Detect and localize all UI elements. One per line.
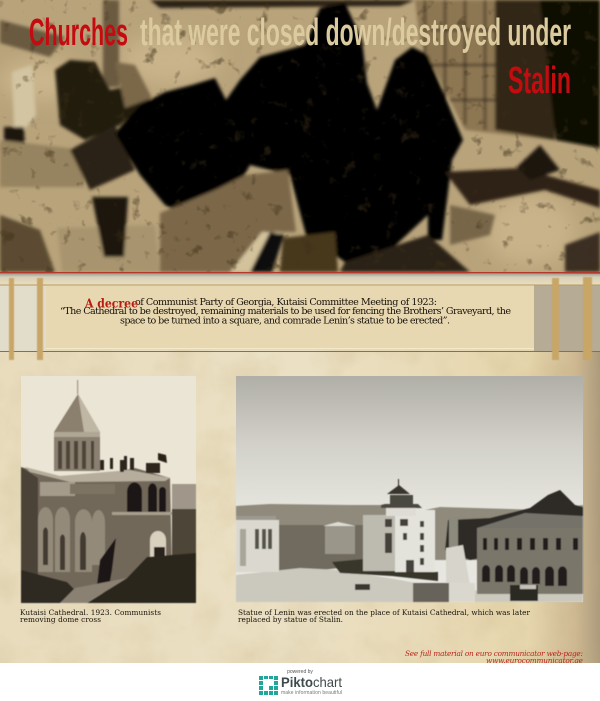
stones and rubble — [160, 170, 296, 272]
decree text: of Communist Party of Georgia, Kutaisi Committee Meeting of 1923: — [135, 297, 437, 308]
scroll rods — [9, 277, 592, 360]
footer: Piktochart logo — [259, 669, 342, 696]
figures on the roof — [100, 456, 160, 473]
decree text: “The Cathedral to be destroyed, remaining materials to be used for fencing the Brothers’ Graveyard, the — [60, 306, 511, 317]
small building — [325, 526, 355, 554]
left pavilion — [236, 520, 279, 572]
red divider under the header — [0, 272, 600, 274]
crowd — [87, 553, 196, 603]
page background: aged paper — [0, 272, 600, 663]
building background — [150, 0, 415, 8]
decree text: space to be turned into a square, and comrade Lenin’s statue to be erected”. — [120, 316, 450, 326]
wordmark: Piktochart — [281, 674, 342, 690]
right background building — [172, 484, 196, 509]
portal — [150, 531, 166, 560]
caption: Kutaisi Cathedral: removing dome cross — [20, 615, 101, 624]
decree text — [60, 297, 511, 326]
caption: Kutaisi Cathedral: Kutaisi Cathedral. 1923. Communists — [20, 608, 161, 617]
icon: logo squares — [259, 676, 278, 695]
photo: Kutaisi Cathedral — [21, 376, 196, 603]
central tower building — [363, 515, 396, 571]
photo grain — [0, 0, 600, 272]
powered by: powered by — [287, 669, 313, 675]
drum — [54, 432, 100, 471]
middle ground — [278, 525, 365, 575]
statue and plinth — [449, 517, 458, 547]
source note — [405, 649, 583, 665]
church body — [21, 467, 172, 590]
tree — [96, 538, 116, 593]
caption: Lenin statue: Statue of Lenin was erected on the place of Kutaisi Cathedral, which was later — [238, 608, 530, 617]
vehicles — [355, 584, 370, 590]
mass of workers: bent, central, right — [115, 3, 463, 262]
photo: Lenin statue square — [236, 376, 583, 602]
title — [29, 12, 571, 102]
bell arches — [127, 482, 166, 512]
footer: white strip — [0, 663, 600, 701]
caption: Lenin statue: replaced by statue of Stalin. — [238, 615, 343, 624]
title word: Churches: Churches — [29, 12, 128, 54]
decree lead-in: A decree — [84, 296, 138, 310]
caption: Lenin statue — [238, 608, 530, 624]
crowd at the left — [55, 60, 150, 140]
panel: scroll banner with decree — [0, 274, 600, 360]
trees — [445, 490, 583, 560]
source note: See full material on euro communicator web-page: — [405, 649, 583, 658]
flag — [158, 453, 167, 463]
source note: www.eurocommunicator.ge — [486, 656, 583, 665]
cross — [77, 380, 78, 394]
lower arches — [38, 507, 105, 572]
dome roof — [54, 394, 100, 432]
panel: header photograph — [0, 0, 600, 272]
hills — [236, 504, 583, 560]
caption: Kutaisi Cathedral — [20, 608, 161, 624]
ground — [236, 568, 583, 602]
tagline: make information beautiful — [281, 690, 342, 696]
arcaded building right — [477, 513, 583, 528]
